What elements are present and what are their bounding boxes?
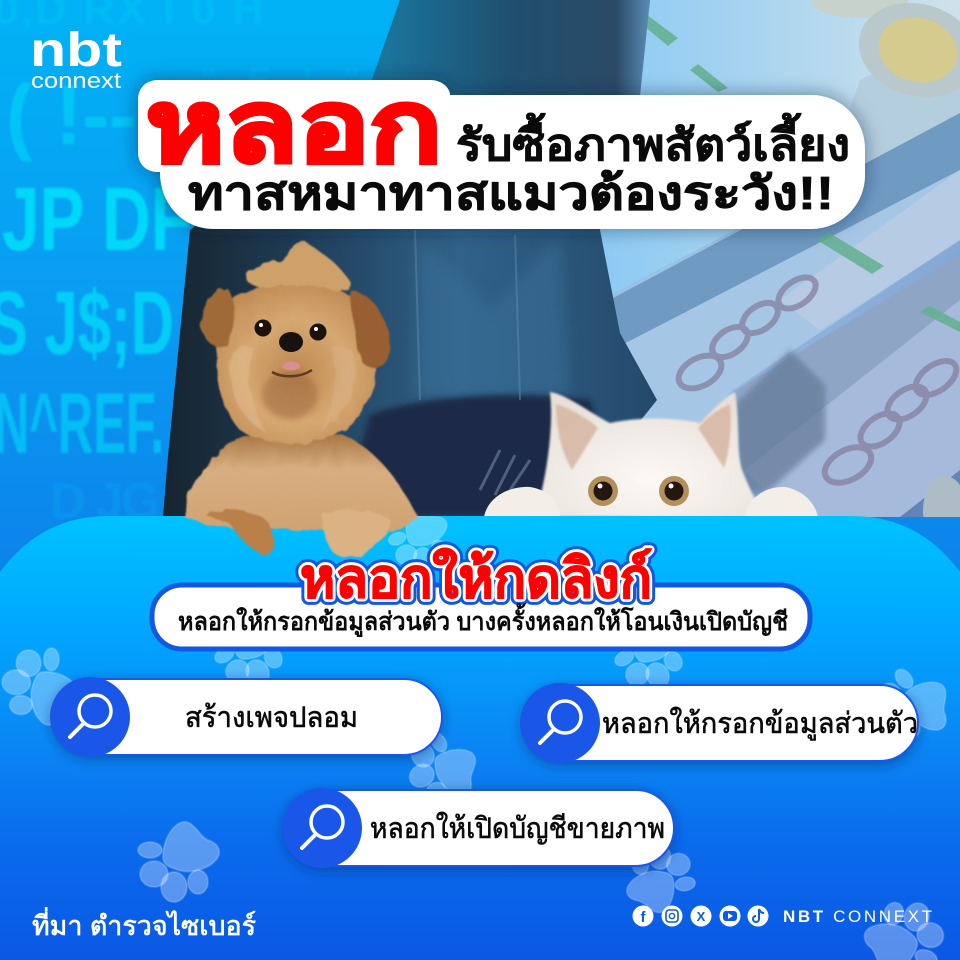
- social icons: X: [697, 909, 706, 924]
- background: code text: [0, 0, 360, 529]
- label: สร้างเพจปลอม: [185, 702, 358, 734]
- icon: magnifier: [282, 788, 362, 868]
- stack one side: [600, 113, 960, 345]
- social icons: [632, 906, 768, 926]
- background: sky blue: [0, 0, 960, 600]
- paw print pattern: [2, 501, 960, 960]
- source credit: ที่มา ตำรวจไซเบอร์: [32, 907, 256, 941]
- banknote zeros: [673, 271, 960, 490]
- logo: nbt connext: nbt: [30, 24, 122, 77]
- title: line two: ทาสหมาทาสแมวต้องระวัง!!: [188, 167, 834, 219]
- title: line one: รับซื้อภาพสัตว์เลี้ยง: [456, 112, 850, 170]
- photo: banknotes: [590, 0, 960, 544]
- brand label: NBT CONNEXT: [783, 907, 932, 926]
- background: code text: ( !--: [6, 68, 136, 162]
- logo: nbt connext: [30, 24, 122, 93]
- search pill: personal data: [520, 683, 918, 763]
- shadow of hand: [735, 350, 825, 500]
- background: code text: N^REF.: [0, 376, 164, 472]
- green strips: [627, 6, 960, 332]
- photo: hooded figure: [163, 0, 657, 517]
- title: red keyword: หลอก: [146, 71, 442, 183]
- subheading: red title: หลอกให้กดลิงก์: [300, 547, 652, 609]
- photo: white cat: [484, 392, 818, 517]
- label: หลอกให้เปิดบัญชีขายภาพ: [370, 811, 665, 845]
- note two face: [745, 300, 960, 517]
- social icons: f: [640, 909, 646, 926]
- label: หลอกให้กรอกข้อมูลส่วนตัว: [602, 706, 918, 741]
- background: code text: JP DF: [2, 170, 192, 270]
- background: code text: D JG: [50, 473, 160, 529]
- panel: lower blue section: [0, 516, 960, 960]
- photo: yorkshire terrier dog: [184, 242, 418, 558]
- icon: magnifier: [50, 677, 130, 757]
- subheading: red title: หลอกให้กดลิงก์: [300, 547, 652, 609]
- note one face: [626, 170, 960, 423]
- subheading: red title: หลอกให้กดลิงก์: [300, 547, 652, 609]
- search pill: open account: [282, 788, 674, 868]
- icon: magnifier: [520, 683, 600, 763]
- stack two side: [733, 255, 960, 408]
- logo: nbt connext: connext: [31, 68, 121, 93]
- subheading pill: [152, 547, 810, 649]
- subheading: description: หลอกให้กรอกข้อมูลส่วนตัว บางครั้งหลอกให้โอนเงินเปิดบัญชี: [178, 602, 788, 638]
- search pill: fake page: [50, 677, 442, 757]
- background: code text: "EI": [200, 59, 360, 100]
- title banner: [138, 71, 865, 229]
- coin: [812, 0, 960, 544]
